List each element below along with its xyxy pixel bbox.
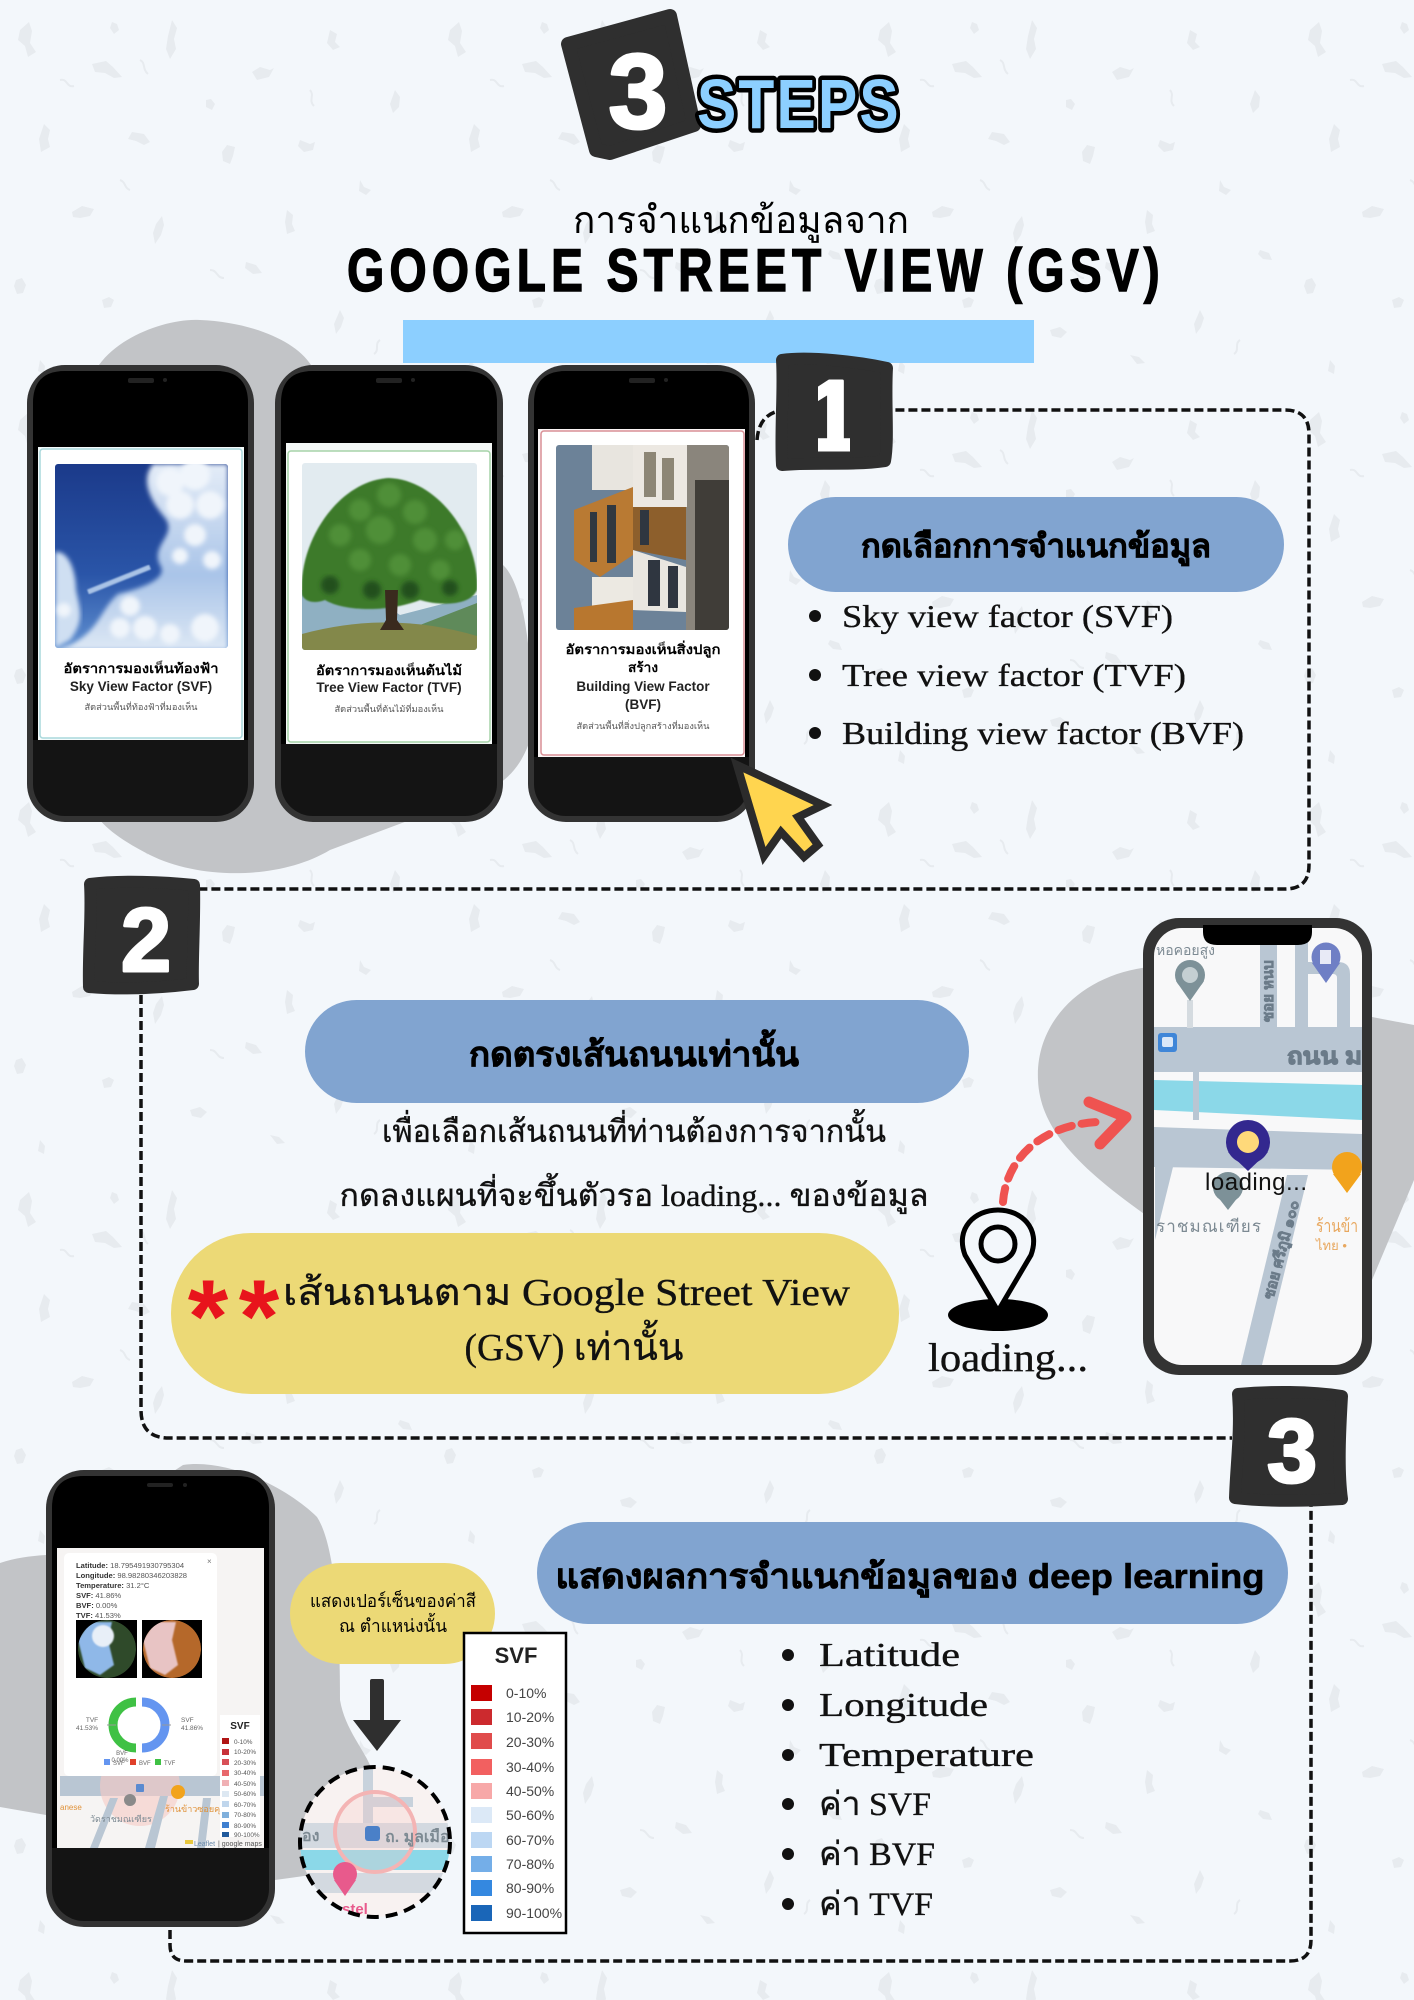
text: instructions: เพื่อเลือกเส้นถนนที่ท่านต้องการจากนั้น xyxy=(382,1109,886,1149)
segmented photo xyxy=(142,1620,202,1678)
pill: step 1 heading: กดเลือกการจำแนกข้อมูล xyxy=(861,528,1211,567)
legend: SVF: 30-40% xyxy=(506,1759,554,1775)
list: view factors: Tree view factor (TVF) xyxy=(842,657,1186,693)
icon: cursor xyxy=(737,765,823,857)
list: results: ค่า SVF xyxy=(819,1787,931,1823)
map pin: food xyxy=(1332,1152,1362,1193)
list: results: ค่า TVF xyxy=(819,1887,933,1923)
list: results: Longitude xyxy=(819,1687,988,1724)
map labels: หอคอยสูง xyxy=(1156,942,1215,959)
title: GOOGLE STREET VIEW (GSV) xyxy=(347,237,1160,304)
dashed frame: step three xyxy=(170,1505,1311,1961)
legend: SVF: 0-10% xyxy=(506,1685,546,1701)
donut chart xyxy=(107,1702,171,1748)
blob: map phone backdrop xyxy=(1038,966,1414,1280)
legend: SVF: 50-60% xyxy=(506,1807,554,1823)
badge: step 2: 2 xyxy=(121,891,171,991)
building caption: อัตราการมองเห็นสิ่งปลูก xyxy=(566,640,721,658)
donut labels: SVF xyxy=(181,1717,194,1724)
donut labels xyxy=(76,1717,203,1767)
list: results: Latitude xyxy=(819,1637,960,1674)
magnifier circle: อง xyxy=(302,1828,319,1845)
phone: map loading xyxy=(1143,918,1372,1375)
magnifier circle: ถ. มูลเมือง xyxy=(385,1828,457,1848)
pill: step 1 heading xyxy=(788,497,1284,592)
phone: results xyxy=(46,1470,275,1927)
map pin: temple xyxy=(1175,960,1205,1001)
result map: | google maps xyxy=(218,1841,262,1848)
building caption xyxy=(566,640,721,732)
blob: step three backdrop xyxy=(0,1464,372,1880)
mini legend: SVF xyxy=(230,1721,250,1732)
map labels: ซอย หนบ xyxy=(1260,960,1277,1022)
list: results: ค่า BVF xyxy=(819,1837,935,1873)
mini legend: 70-80% xyxy=(234,1812,256,1819)
building caption: (BVF) xyxy=(625,697,661,712)
mini legend xyxy=(220,1715,260,1839)
list: results: Temperature xyxy=(819,1737,1034,1774)
mini legend: 40-50% xyxy=(234,1781,256,1788)
map labels: ไทย • xyxy=(1315,1238,1347,1253)
bus icon xyxy=(1158,1033,1177,1052)
result map xyxy=(57,1548,267,1848)
map pin: temple two xyxy=(1213,1172,1243,1210)
list: view factors xyxy=(809,598,1244,751)
building photo xyxy=(556,445,729,630)
result map: anese xyxy=(60,1803,82,1812)
list: view factors: Building view factor (BVF) xyxy=(842,715,1244,751)
blob: top phones backdrop xyxy=(92,320,531,873)
callout: GSV only: * xyxy=(188,1259,229,1375)
popup card: BVF: 0.00% xyxy=(76,1601,118,1610)
tree caption: สัดส่วนพื้นที่ต้นไม้ที่มองเห็น xyxy=(334,703,444,714)
text: instructions: กดลงแผนที่จะขึ้นตัวรอ loading... ของข้อมูล xyxy=(340,1173,928,1214)
map labels: ร้านข้า xyxy=(1316,1216,1358,1236)
legend: SVF: 80-90% xyxy=(506,1880,554,1896)
magnifier circle xyxy=(300,1767,457,1918)
badge: big 3: 3 xyxy=(609,33,667,151)
subtitle thai: การจำแนกข้อมูลจาก xyxy=(573,200,909,243)
pin: selected xyxy=(1226,1120,1270,1171)
result map: ร้านข้าวซอยคุณ xyxy=(165,1804,228,1815)
badge: step 3 xyxy=(1235,1392,1342,1502)
map labels xyxy=(1156,942,1362,1301)
map pin: fuel xyxy=(1312,942,1340,983)
label: loading: loading... xyxy=(928,1335,1088,1380)
phone: building view factor xyxy=(528,365,755,822)
donut labels: 41.53% xyxy=(76,1725,98,1732)
tree caption: อัตราการมองเห็นต้นไม้ xyxy=(316,661,462,678)
sky caption: สัดส่วนพื้นที่ท้องฟ้าที่มองเห็น xyxy=(84,701,198,712)
heading: STEPS: STEPS xyxy=(697,64,899,143)
legend: SVF xyxy=(464,1633,566,1933)
mini legend: 60-70% xyxy=(234,1802,256,1809)
legend: SVF: 60-70% xyxy=(506,1832,554,1848)
callout: percent note: แสดงเปอร์เซ็นของค่าสี xyxy=(310,1589,476,1611)
callout: GSV only xyxy=(171,1233,899,1394)
callout: percent note: ณ ตำแหน่งนั้น xyxy=(339,1613,447,1636)
building caption: Building View Factor xyxy=(576,679,710,694)
donut labels: 41.86% xyxy=(181,1725,203,1732)
popup card: × xyxy=(207,1557,212,1566)
pill: step 3 heading: แสดงผลการจำแนกข้อมูลของ deep learning xyxy=(556,1558,1264,1598)
legend: SVF: 40-50% xyxy=(506,1783,554,1799)
callout: percent note xyxy=(290,1563,495,1664)
phone: tree view factor xyxy=(275,365,503,822)
mini legend: 10-20% xyxy=(234,1749,256,1756)
text: instructions xyxy=(340,1109,928,1214)
popup card xyxy=(64,1553,217,1776)
mini legend: 90-100% xyxy=(234,1832,260,1839)
tree caption xyxy=(316,661,462,714)
badge: step 2 xyxy=(89,882,194,991)
donut labels: TVF xyxy=(164,1761,176,1767)
callout: GSV only: * xyxy=(239,1259,280,1375)
sky caption: Sky View Factor (SVF) xyxy=(70,679,212,694)
donut labels: SVF xyxy=(113,1761,125,1767)
donut labels: TVF xyxy=(86,1717,98,1724)
mini legend: 20-30% xyxy=(234,1760,256,1767)
badge: step 1: 1 xyxy=(805,360,861,472)
popup card: SVF: 41.86% xyxy=(76,1591,121,1600)
mini legend: 50-60% xyxy=(234,1791,256,1798)
legend: SVF: SVF xyxy=(495,1643,537,1668)
legend: SVF: 10-20% xyxy=(506,1709,554,1725)
icon: location pin xyxy=(948,1210,1048,1331)
popup card: TVF: 41.53% xyxy=(76,1611,121,1620)
tree photo xyxy=(302,463,477,650)
pill: step 3 heading xyxy=(537,1522,1288,1624)
mini legend: 30-40% xyxy=(234,1770,256,1777)
label: loading on map: loading... xyxy=(1205,1169,1307,1196)
popup card: Temperature: 31.2°C xyxy=(76,1581,150,1590)
donut labels: 0.00% xyxy=(111,1758,129,1764)
callout: GSV only: (GSV) เท่านั้น xyxy=(464,1319,684,1369)
building caption: สร้าง xyxy=(628,660,658,675)
callout: GSV only: เส้นถนนตาม Google Street View xyxy=(283,1272,851,1314)
legend: SVF: 20-30% xyxy=(506,1734,554,1750)
badge: step 1 xyxy=(781,359,887,472)
sky caption: อัตราการมองเห็นท้องฟ้า xyxy=(64,659,218,676)
popup card: Latitude: 18.795491930795304 xyxy=(76,1561,184,1570)
fisheye photo xyxy=(76,1620,137,1678)
result map: วัดราชมณเฑียร xyxy=(90,1814,152,1824)
list: results xyxy=(782,1637,1034,1923)
magnifier circle: Hostel xyxy=(322,1901,368,1918)
building caption: สัดส่วนพื้นที่สิ่งปลูกสร้างที่มองเห็น xyxy=(576,720,710,732)
dashed frame: step two xyxy=(141,995,1232,1438)
donut labels: BVF xyxy=(116,1751,128,1757)
arrow: red dashed xyxy=(1003,1102,1126,1202)
legend: SVF: 70-80% xyxy=(506,1856,554,1872)
mini legend: 0-10% xyxy=(234,1739,253,1746)
map labels: ซอย ศรีภูมิ ๑๐๐ xyxy=(1259,1198,1304,1301)
mini legend: 80-90% xyxy=(234,1823,256,1830)
pill: step 2 heading xyxy=(305,1000,969,1103)
result map: Leaflet xyxy=(194,1841,215,1848)
arrow: down xyxy=(353,1679,401,1751)
accent bar xyxy=(403,320,1034,363)
dashed frame: step one xyxy=(200,410,1309,889)
phone: sky view factor xyxy=(27,365,254,822)
map labels: ราชมณเฑียร xyxy=(1156,1217,1261,1236)
pill: step 2 heading: กดตรงเส้นถนนเท่านั้น xyxy=(469,1029,799,1074)
sky photo xyxy=(55,460,228,650)
badge: step 3: 3 xyxy=(1267,1402,1317,1502)
legend: SVF: 90-100% xyxy=(506,1905,562,1921)
popup card: Longitude: 98.98280346203828 xyxy=(76,1571,187,1580)
notch xyxy=(1203,925,1312,945)
sky caption xyxy=(64,659,218,712)
donut labels: BVF xyxy=(139,1761,151,1767)
map labels: ถนน ม xyxy=(1287,1043,1362,1069)
tree caption: Tree View Factor (TVF) xyxy=(316,680,462,695)
badge: big 3 xyxy=(568,16,694,153)
list: view factors: Sky view factor (SVF) xyxy=(842,598,1173,634)
